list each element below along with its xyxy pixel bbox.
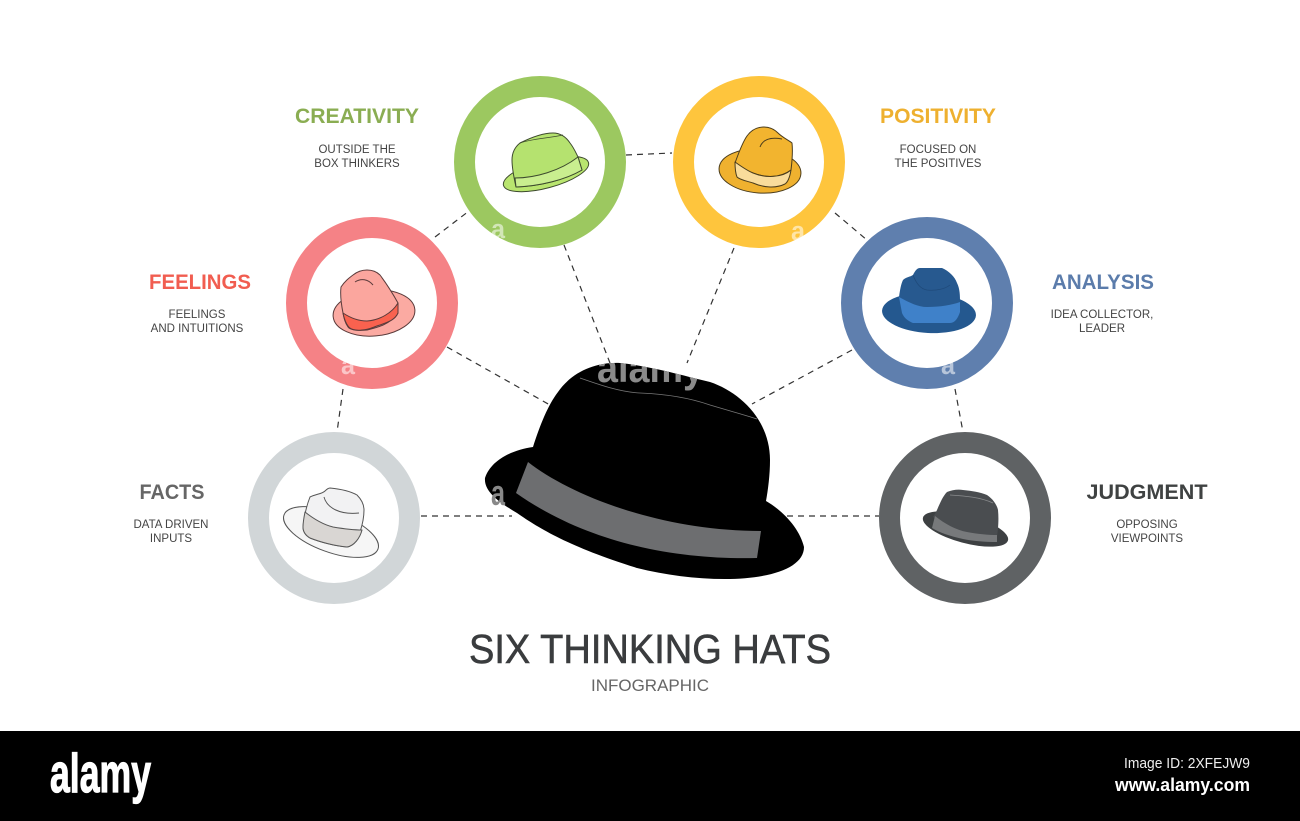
footer bar — [0, 731, 1300, 821]
dark ring — [890, 442, 1040, 594]
dashed connectors — [337, 153, 963, 516]
hat band — [516, 462, 761, 558]
creativity description: BOX THINKERS — [314, 158, 400, 170]
yellow ring — [684, 86, 834, 238]
panel: analysis — [852, 228, 1154, 378]
icon: dark hat — [919, 490, 1012, 554]
watermarks: a — [341, 350, 356, 380]
judgment heading: JUDGMENT — [1086, 481, 1208, 504]
image id: Image ID: 2XFEJW9 — [1124, 755, 1250, 772]
creativity heading: CREATIVITY — [295, 105, 419, 128]
watermarks: a — [791, 216, 806, 246]
footer logo: alamy — [50, 742, 151, 804]
watermarks: a — [941, 350, 956, 380]
hat brim — [485, 447, 804, 579]
positivity description: THE POSITIVES — [895, 158, 982, 170]
facts description: INPUTS — [150, 533, 192, 545]
analysis description: LEADER — [1079, 323, 1125, 335]
analysis description: IDEA COLLECTOR, — [1051, 309, 1153, 321]
crown crease — [580, 378, 757, 419]
positivity heading: POSITIVITY — [880, 105, 996, 128]
green ring — [464, 86, 616, 238]
analysis heading: ANALYSIS — [1052, 271, 1154, 294]
feelings description: AND INTUITIONS — [151, 323, 244, 335]
hat crown — [516, 363, 770, 558]
panel: facts — [134, 442, 410, 594]
icon: white hat — [277, 488, 385, 568]
judgment description: OPPOSING — [1116, 519, 1178, 531]
grey ring — [258, 442, 410, 594]
icon: red hat — [331, 270, 417, 339]
watermarks — [341, 214, 956, 513]
title: SIX THINKING HATS — [469, 626, 831, 672]
icon: yellow hat — [718, 127, 802, 196]
icon: large black hat — [485, 363, 804, 579]
panel: positivity — [684, 86, 996, 238]
panel: judgment — [890, 442, 1208, 594]
positivity description: FOCUSED ON — [900, 144, 976, 156]
panel: creativity — [295, 86, 616, 238]
feelings heading: FEELINGS — [149, 271, 251, 294]
facts heading: FACTS — [140, 481, 204, 504]
watermarks: a — [491, 214, 506, 244]
creativity description: OUTSIDE THE — [318, 144, 396, 156]
watermarks: alamy — [597, 344, 705, 391]
red ring — [296, 228, 448, 378]
panel: feelings — [149, 228, 448, 378]
website: www.alamy.com — [1114, 775, 1250, 795]
icon: blue hat — [881, 268, 977, 335]
subtitle: INFOGRAPHIC — [591, 676, 709, 695]
judgment description: VIEWPOINTS — [1111, 533, 1183, 545]
feelings description: FEELINGS — [169, 309, 226, 321]
watermarks: a — [491, 472, 506, 513]
facts description: DATA DRIVEN — [134, 519, 208, 531]
icon: green hat — [500, 133, 592, 199]
blue ring — [852, 228, 1002, 378]
